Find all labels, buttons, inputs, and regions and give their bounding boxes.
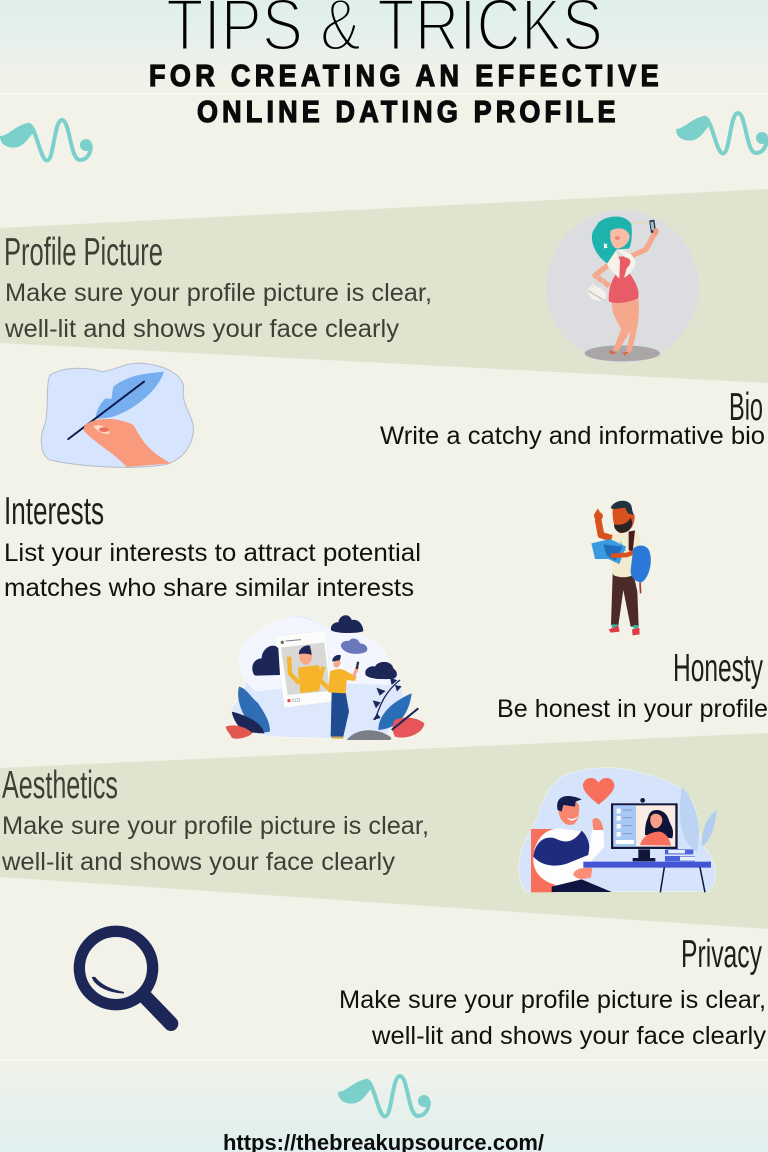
text: aesthetics body: well-lit and shows your face clearly [1,848,395,876]
text: profile picture body: Make sure your profile picture is clear, [5,279,432,307]
illustration: man with book and backpack [591,501,651,635]
text: interests body: matches who share similar interests [4,574,414,602]
band: aesthetics [0,733,768,929]
icon: dark clouds [252,615,397,679]
text: interests body: List your interests to attract potential [4,539,421,567]
text: aesthetics body: Make sure your profile picture is clear, [2,812,429,840]
text: bio body: Write a catchy and informative bio [380,422,765,450]
band: profile picture [0,189,768,383]
subtitle line 1: FOR CREATING AN EFFECTIVE [149,59,659,93]
text: interests body [4,539,421,602]
illustration: hand holding quill [41,363,193,467]
subtitle line 2: ONLINE DATING PROFILE [197,95,616,129]
text: profile picture body [4,279,432,343]
heading: aesthetics: Aesthetics [2,764,118,807]
illustration: woman taking selfie [546,210,699,363]
icon: squiggle right [676,113,768,154]
heading: interests: Interests [4,490,104,533]
icon: squiggle left [0,120,92,160]
illustration: video call date [519,768,717,892]
heading: profile picture: Profile Picture [4,231,163,274]
text: profile picture body: well-lit and shows your face clearly [4,315,399,343]
icon: squiggle bottom [338,1076,430,1116]
illustration: social media photo post [226,615,424,740]
text: privacy body [339,986,766,1050]
text: aesthetics body [1,812,429,876]
text: honesty body: Be honest in your profile [497,695,768,723]
text: privacy body: well-lit and shows your face clearly [371,1022,766,1050]
icon: magnifying glass [79,931,171,1024]
text: privacy body: Make sure your profile picture is clear, [339,986,766,1014]
icon: heart [583,778,614,805]
